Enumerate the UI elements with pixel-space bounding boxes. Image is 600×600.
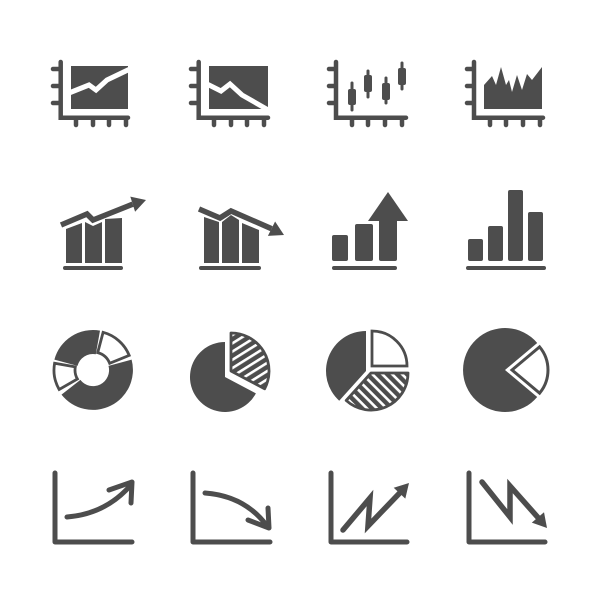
icon: zigzag rising	[331, 473, 409, 542]
icon: line chart up	[53, 62, 130, 125]
icon: bars with up arrow	[332, 192, 408, 270]
icon: bar chart falling arrow	[199, 209, 284, 270]
icon: bar chart	[466, 190, 546, 270]
icon: curve rising	[55, 473, 132, 542]
icon: candlestick chart	[329, 62, 406, 125]
icon: pie chart with wedge	[463, 328, 548, 412]
icon: pie chart three parts	[326, 331, 408, 410]
icon: curve falling	[193, 473, 270, 542]
icon: line chart down	[191, 62, 270, 125]
icon: donut chart	[54, 330, 133, 410]
icon: pie chart with hatched slice	[190, 333, 269, 412]
icon: zigzag falling	[469, 473, 547, 542]
icon: bar chart rising arrow	[61, 197, 146, 270]
icon: area chart	[467, 62, 543, 125]
